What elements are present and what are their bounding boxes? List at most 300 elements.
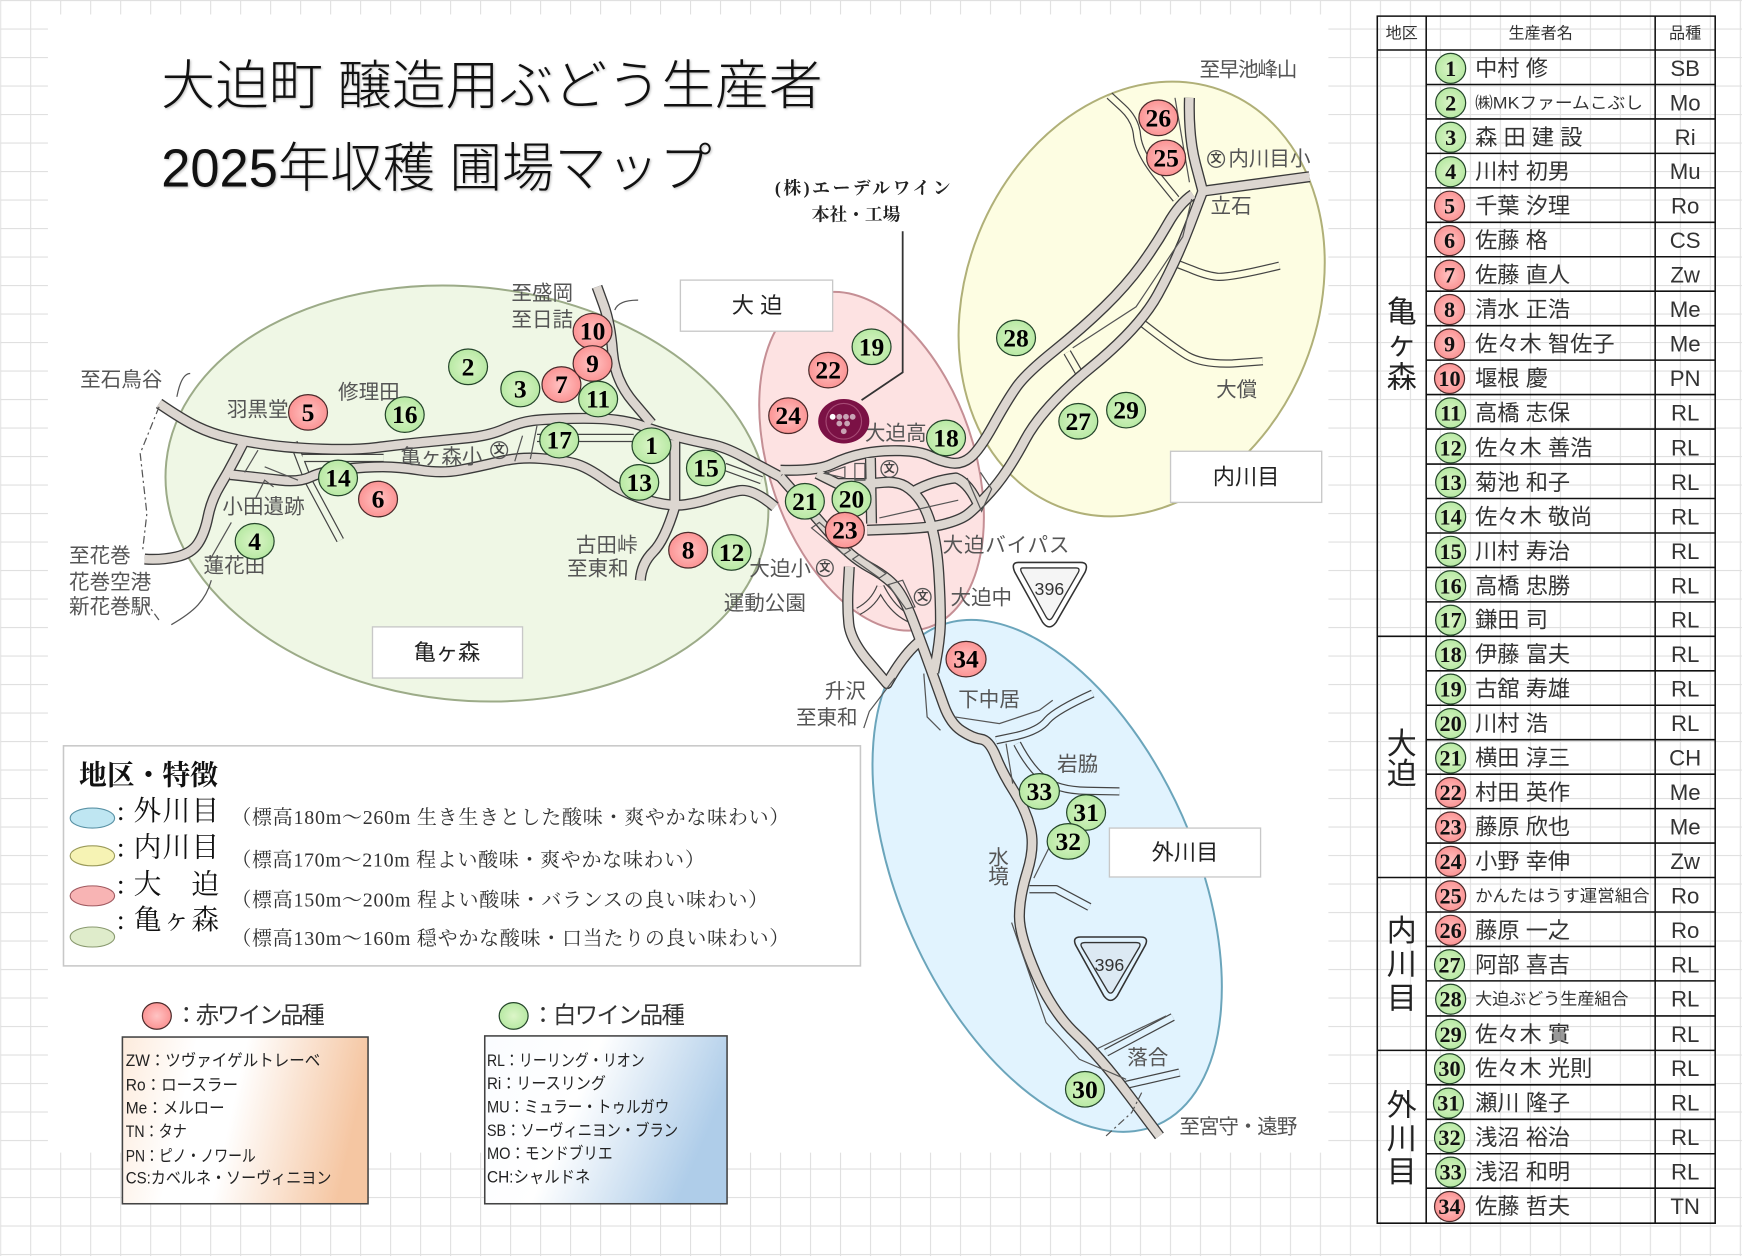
marker 23: 23 bbox=[832, 516, 858, 545]
panel: white wine varieties: Ri：リースリング bbox=[487, 1074, 606, 1093]
row 15: 川村 寿治 bbox=[1475, 539, 1570, 564]
row 12: RL bbox=[1671, 435, 1699, 460]
map place labels: 亀ヶ森小 bbox=[400, 445, 483, 468]
district column: Uchikawame: 目 bbox=[1387, 983, 1417, 1016]
route 396 shield, upper: 396 bbox=[1035, 579, 1064, 599]
map place labels: 至東和 bbox=[796, 707, 858, 730]
map place labels: 至盛岡 bbox=[511, 282, 573, 305]
row 31: RL bbox=[1671, 1091, 1699, 1116]
row 1: SB bbox=[1670, 56, 1700, 81]
panel: white wine varieties: MU：ミュラー・トゥルガウ bbox=[487, 1098, 669, 1117]
row 8 bbox=[1435, 295, 1701, 325]
row 26: 藤原 一之 bbox=[1475, 918, 1570, 943]
row 3 bbox=[1436, 122, 1696, 152]
row 26: 26 bbox=[1440, 918, 1462, 943]
panel: red wine varieties: ZW：ツヴァイゲルトレーベ bbox=[126, 1051, 320, 1070]
row 29 bbox=[1436, 1019, 1699, 1049]
row 9: Me bbox=[1670, 332, 1701, 357]
table header bbox=[1386, 24, 1701, 42]
white wine legend heading: ：白ワイン品種 bbox=[531, 1002, 685, 1028]
row 33: 浅沼 和明 bbox=[1475, 1160, 1570, 1185]
road network bbox=[140, 96, 1309, 1136]
row 7 bbox=[1435, 260, 1701, 290]
marker 8: 8 bbox=[682, 536, 695, 565]
map place labels: 大迫バイパス bbox=[943, 534, 1069, 557]
row 24: Zw bbox=[1670, 849, 1701, 874]
marker 15 bbox=[686, 450, 725, 486]
row 6: CS bbox=[1670, 228, 1701, 253]
row 31: 31 bbox=[1437, 1091, 1460, 1116]
district label: Uchikawame bbox=[1171, 451, 1322, 502]
legend row: Sotokawame bbox=[70, 796, 789, 829]
row 5: 千葉 汐理 bbox=[1475, 194, 1570, 219]
marker 14: 14 bbox=[325, 463, 351, 492]
marker 22: 22 bbox=[815, 356, 841, 385]
legend row: Sotokawame: （標高180m～260m 生き生きとした酸味・爽やかな味わい） bbox=[231, 806, 789, 829]
row 29: RL bbox=[1671, 1022, 1699, 1047]
row 27: RL bbox=[1671, 952, 1699, 977]
row 9: 佐々木 智佐子 bbox=[1475, 332, 1615, 357]
row 9: 9 bbox=[1444, 332, 1455, 357]
row 4 bbox=[1436, 157, 1701, 187]
row 25 bbox=[1436, 881, 1699, 911]
row 7: 7 bbox=[1444, 263, 1455, 288]
route 396 shield, lower bbox=[1075, 937, 1146, 1000]
row 1: 1 bbox=[1445, 56, 1456, 81]
row 30: 30 bbox=[1438, 1056, 1461, 1081]
row 10: 堰根 慶 bbox=[1475, 366, 1548, 391]
district column: Osako bbox=[1387, 728, 1417, 791]
panel: white wine varieties: CH:シャルドネ bbox=[487, 1168, 590, 1187]
row 26 bbox=[1436, 915, 1699, 945]
row 32 bbox=[1435, 1123, 1699, 1153]
map place labels bbox=[69, 59, 1311, 1139]
legend row: Uchikawame: : 内川目 bbox=[117, 833, 219, 864]
row 17: 17 bbox=[1440, 608, 1462, 633]
marker 21: 21 bbox=[792, 487, 818, 516]
map place labels: 立石 bbox=[1211, 195, 1252, 218]
row 16: 16 bbox=[1440, 573, 1462, 598]
marker 4: 4 bbox=[248, 527, 261, 556]
district column: Sotokawame: 川 bbox=[1387, 1123, 1417, 1156]
legend row: Osako: （標高150m～200m 程よい酸味・バランスの良い味わい） bbox=[231, 888, 768, 911]
district column: Uchikawame: 内 bbox=[1387, 915, 1417, 948]
row 13: 13 bbox=[1440, 470, 1462, 495]
district label: Osako: 大 迫 bbox=[732, 293, 782, 318]
marker 26 bbox=[1139, 100, 1178, 136]
panel: red wine varieties: PN：ピノ・ノワール bbox=[126, 1146, 256, 1165]
legend row: Kamegamori bbox=[70, 905, 789, 950]
marker 6 bbox=[359, 481, 397, 517]
row 25: かんたはうす運営組合 bbox=[1475, 886, 1650, 905]
route 396 shield, lower: 396 bbox=[1095, 955, 1124, 975]
panel: red wine varieties: Ro：ロースラー bbox=[126, 1075, 238, 1094]
marker 34 bbox=[946, 641, 986, 677]
route 396 shield, upper bbox=[1013, 562, 1086, 627]
marker 10: 10 bbox=[580, 317, 605, 346]
marker 27: 27 bbox=[1066, 407, 1091, 436]
row 21: 21 bbox=[1440, 746, 1462, 771]
marker 1 bbox=[632, 428, 671, 463]
row 33 bbox=[1436, 1157, 1699, 1187]
row 30 bbox=[1435, 1054, 1699, 1084]
row 13 bbox=[1436, 467, 1699, 497]
row 11: 11 bbox=[1440, 400, 1461, 425]
marker 21 bbox=[785, 484, 824, 519]
marker 12: 12 bbox=[719, 538, 744, 567]
row 19: RL bbox=[1671, 677, 1699, 702]
row 34: 34 bbox=[1438, 1194, 1461, 1219]
map place labels: 升沢 bbox=[825, 680, 866, 703]
row 28 bbox=[1436, 984, 1699, 1014]
row 28: 大迫ぶどう生産組合 bbox=[1475, 990, 1629, 1009]
map place labels: 羽黒堂 bbox=[227, 399, 289, 422]
row 16 bbox=[1436, 571, 1699, 601]
district area: Sotokawame ellipse bbox=[801, 567, 1293, 1185]
marker 28 bbox=[997, 320, 1036, 356]
panel: red wine varieties: CS:カベルネ・ソーヴィニヨン bbox=[126, 1169, 331, 1188]
row 33: RL bbox=[1671, 1160, 1699, 1185]
row 10: PN bbox=[1670, 366, 1701, 391]
row 19: 19 bbox=[1440, 677, 1462, 702]
district area: Uchikawame ellipse bbox=[895, 26, 1388, 572]
row 8: Me bbox=[1670, 297, 1701, 322]
winery leader line bbox=[862, 231, 903, 400]
legend row: Osako bbox=[70, 869, 768, 911]
map place labels: 古田峠 bbox=[576, 534, 638, 557]
row 34: 佐藤 哲夫 bbox=[1475, 1194, 1570, 1219]
icons: school symbols bbox=[491, 151, 1224, 605]
map place labels: 水 bbox=[988, 847, 1009, 870]
row 27 bbox=[1435, 950, 1699, 980]
row 31: 瀬川 隆子 bbox=[1475, 1091, 1570, 1116]
row 34: TN bbox=[1670, 1194, 1700, 1219]
row 12: 12 bbox=[1440, 435, 1462, 460]
row 6 bbox=[1435, 226, 1701, 256]
legend row: Uchikawame bbox=[70, 833, 705, 871]
row 22: 村田 英作 bbox=[1475, 780, 1570, 805]
marker 20 bbox=[832, 481, 871, 517]
marker 24: 24 bbox=[775, 401, 801, 430]
row 33: 33 bbox=[1440, 1160, 1462, 1185]
row 3: 森 田 建 設 bbox=[1475, 125, 1583, 150]
map place labels: 岩脇 bbox=[1057, 753, 1098, 776]
marker 18: 18 bbox=[933, 423, 959, 452]
row 6: 6 bbox=[1444, 228, 1455, 253]
legend heading: 地区・特徴 bbox=[79, 760, 218, 791]
row 24: 小野 幸伸 bbox=[1475, 849, 1570, 874]
row 10: 10 bbox=[1438, 366, 1461, 391]
district column: Osako: 大 bbox=[1387, 728, 1417, 761]
marker 19: 19 bbox=[859, 332, 884, 361]
row 4: 川村 初男 bbox=[1475, 159, 1570, 184]
district column: Kamegamori bbox=[1387, 296, 1417, 394]
table header: 地区 bbox=[1386, 24, 1418, 42]
marker 12 bbox=[712, 535, 751, 570]
district column: Kamegamori: 森 bbox=[1387, 361, 1417, 394]
map place labels: 花巻空港 bbox=[69, 571, 152, 594]
map place labels: 至早池峰山 bbox=[1199, 59, 1297, 82]
marker 11 bbox=[579, 381, 618, 417]
row 7: Zw bbox=[1670, 263, 1701, 288]
map place labels: 蓮花田 bbox=[204, 554, 265, 577]
row 31 bbox=[1433, 1088, 1699, 1118]
map place labels: 下中居 bbox=[958, 689, 1020, 712]
row 14: 佐々木 敬尚 bbox=[1475, 504, 1592, 529]
row 15: 15 bbox=[1440, 539, 1462, 564]
marker 14 bbox=[319, 460, 357, 496]
district label: Sotokawame bbox=[1109, 828, 1261, 877]
row 1: 中村 修 bbox=[1475, 56, 1548, 81]
winery label: (株)エーデルワイン bbox=[775, 178, 950, 199]
map place labels: 境 bbox=[988, 865, 1009, 888]
table header: 品種 bbox=[1669, 24, 1701, 42]
map place labels: 至花巻 bbox=[69, 544, 131, 567]
district label: Uchikawame: 内川目 bbox=[1213, 464, 1279, 489]
marker 16 bbox=[385, 397, 424, 432]
row 18: 18 bbox=[1440, 642, 1462, 667]
row 23 bbox=[1436, 812, 1701, 842]
map place labels: 運動公園 bbox=[724, 592, 806, 615]
row 22: 22 bbox=[1440, 780, 1462, 805]
map sheet bbox=[48, 14, 1328, 1153]
marker 4 bbox=[235, 524, 274, 559]
panel: white wine varieties: SB：ソーヴィニヨン・ブラン bbox=[487, 1120, 678, 1140]
winery label: 本社・工場 bbox=[812, 205, 901, 225]
marker 7 bbox=[542, 367, 581, 402]
marker 27 bbox=[1059, 403, 1098, 439]
marker 2 bbox=[449, 349, 488, 385]
legend row: Kamegamori: （標高130m～160m 穏やかな酸味・口当たりの良い味わい） bbox=[231, 927, 789, 950]
row 28: RL bbox=[1671, 987, 1699, 1012]
marker 9: 9 bbox=[586, 349, 599, 378]
table rows bbox=[1433, 53, 1701, 1222]
marker 3 bbox=[501, 371, 540, 407]
row 14: 14 bbox=[1440, 504, 1462, 529]
row 22: Me bbox=[1670, 780, 1701, 805]
district column: Kamegamori: ヶ bbox=[1387, 328, 1417, 361]
marker 10 bbox=[573, 313, 612, 349]
row 5: 5 bbox=[1444, 194, 1455, 219]
marker 23 bbox=[825, 512, 864, 548]
map place labels: 大迫高 bbox=[865, 422, 927, 445]
row 9 bbox=[1435, 329, 1701, 359]
row 4: 4 bbox=[1445, 159, 1456, 184]
row 18 bbox=[1436, 640, 1699, 670]
map place labels: 小田遺跡 bbox=[222, 495, 305, 518]
map place labels: 至石鳥谷 bbox=[80, 369, 162, 392]
marker 1: 1 bbox=[645, 431, 658, 460]
district area: Osako ellipse bbox=[718, 262, 1025, 661]
legend row: Uchikawame: （標高170m～210m 程よい酸味・爽やかな味わい） bbox=[231, 848, 705, 871]
map place labels: 大迫中 bbox=[950, 586, 1012, 609]
map markers: producers bbox=[235, 100, 1186, 1107]
row 26: Ro bbox=[1671, 918, 1699, 943]
marker 17 bbox=[540, 422, 579, 458]
red wine legend heading: ：赤ワイン品種 bbox=[175, 1002, 325, 1028]
district column: Sotokawame: 目 bbox=[1387, 1156, 1417, 1189]
marker 32: 32 bbox=[1056, 827, 1081, 856]
row 17: 鎌田 司 bbox=[1475, 608, 1548, 633]
row 24: 24 bbox=[1440, 849, 1462, 874]
panel: district legend bbox=[63, 746, 860, 966]
row 3: Ri bbox=[1675, 125, 1696, 150]
row 32: RL bbox=[1671, 1125, 1699, 1150]
row 17 bbox=[1436, 605, 1699, 635]
marker 8 bbox=[669, 532, 708, 568]
marker 33 bbox=[1019, 774, 1059, 809]
row 25: Ro bbox=[1671, 883, 1699, 908]
row 13: 菊池 和子 bbox=[1475, 470, 1570, 495]
marker 7: 7 bbox=[555, 370, 568, 399]
row 23: 藤原 欣也 bbox=[1475, 814, 1570, 839]
marker 11: 11 bbox=[586, 385, 610, 414]
map place labels: 落合 bbox=[1127, 1047, 1169, 1070]
row 20 bbox=[1436, 709, 1699, 739]
marker 26: 26 bbox=[1146, 103, 1171, 132]
row 11 bbox=[1436, 398, 1699, 428]
map place labels: 大迫小 bbox=[749, 558, 811, 581]
icons: school symbols: 文 bbox=[917, 589, 928, 603]
title bbox=[161, 57, 823, 198]
row 32: 浅沼 裕治 bbox=[1475, 1125, 1570, 1150]
panel: red wine varieties: TN：タナ bbox=[126, 1122, 187, 1141]
district column: Osako: 迫 bbox=[1387, 758, 1417, 791]
district label: Kamegamori: 亀ヶ森 bbox=[414, 640, 480, 665]
row 2 bbox=[1436, 88, 1701, 118]
legend row: Sotokawame: : 外川目 bbox=[117, 796, 219, 827]
marker 30: 30 bbox=[1072, 1075, 1098, 1104]
map place labels: 新花巻駅 bbox=[69, 595, 151, 618]
district column: Sotokawame: 外 bbox=[1387, 1089, 1417, 1122]
district label: Osako bbox=[680, 280, 833, 331]
panel: white wine varieties: MO：モンドブリエ bbox=[487, 1143, 613, 1163]
row 28: 28 bbox=[1440, 987, 1462, 1012]
panel: white wine varieties bbox=[485, 1036, 727, 1204]
row 20: 20 bbox=[1440, 711, 1462, 736]
marker 16: 16 bbox=[392, 400, 418, 429]
marker 31 bbox=[1067, 795, 1106, 830]
row 20: RL bbox=[1671, 711, 1699, 736]
row 24 bbox=[1436, 846, 1701, 876]
marker 33: 33 bbox=[1027, 777, 1052, 806]
marker 22 bbox=[809, 352, 848, 388]
legend row: Osako: : 大 迫 bbox=[117, 869, 219, 900]
row 14 bbox=[1436, 502, 1699, 532]
map place labels: 至東和 bbox=[567, 558, 629, 581]
row 16: 高橋 忠勝 bbox=[1475, 573, 1570, 598]
row 19 bbox=[1436, 674, 1699, 704]
marker 19 bbox=[852, 329, 891, 365]
row 18: 伊藤 富夫 bbox=[1475, 642, 1570, 667]
winery label bbox=[775, 178, 950, 225]
marker 28: 28 bbox=[1003, 323, 1029, 352]
map place labels: 内川目小 bbox=[1228, 147, 1311, 170]
row 27: 阿部 喜吉 bbox=[1475, 952, 1570, 977]
row 19: 古舘 寿雄 bbox=[1475, 677, 1570, 702]
row 14: RL bbox=[1671, 504, 1699, 529]
title: 大迫町 醸造用ぶどう生産者 bbox=[161, 57, 823, 116]
row 18: RL bbox=[1671, 642, 1699, 667]
icon: winery grape seal bbox=[818, 399, 869, 443]
district label: Kamegamori bbox=[372, 627, 523, 678]
row 27: 27 bbox=[1438, 952, 1461, 977]
marker 31: 31 bbox=[1073, 798, 1099, 827]
panel: producer table bbox=[1377, 16, 1715, 1223]
panel: red wine varieties: Me：メルロー bbox=[126, 1099, 225, 1118]
row 5: Ro bbox=[1671, 194, 1699, 219]
map place labels: 至宮守・遠野 bbox=[1179, 1116, 1297, 1139]
row 15 bbox=[1436, 536, 1699, 566]
marker 15: 15 bbox=[693, 453, 719, 482]
row 30: RL bbox=[1671, 1056, 1699, 1081]
row 12 bbox=[1436, 433, 1699, 463]
marker 34: 34 bbox=[953, 645, 979, 674]
row 7: 佐藤 直人 bbox=[1475, 263, 1570, 288]
icons: school symbols: 文 bbox=[819, 560, 830, 574]
district label: Sotokawame: 外川目 bbox=[1152, 840, 1218, 865]
marker 13 bbox=[620, 465, 659, 500]
marker 5: 5 bbox=[302, 398, 314, 427]
icons: school symbols: 文 bbox=[884, 461, 895, 475]
row 8: 清水 正浩 bbox=[1475, 297, 1570, 322]
icons: school symbols: 文 bbox=[1211, 151, 1222, 165]
marker 18 bbox=[927, 420, 965, 456]
map place labels: 修理田 bbox=[338, 381, 400, 404]
marker 13: 13 bbox=[626, 468, 652, 497]
marker 9 bbox=[573, 346, 612, 381]
marker 29 bbox=[1107, 392, 1146, 428]
marker 24 bbox=[769, 398, 808, 433]
row 16: RL bbox=[1671, 573, 1699, 598]
title: 2025年収穫 圃場マップ bbox=[161, 139, 711, 198]
marker 30 bbox=[1066, 1071, 1104, 1107]
row 21 bbox=[1436, 743, 1701, 773]
row 23: Me bbox=[1670, 814, 1701, 839]
row 3: 3 bbox=[1445, 125, 1456, 150]
row 11: RL bbox=[1671, 400, 1699, 425]
panel: white wine varieties: RL：リーリング・リオン bbox=[487, 1051, 645, 1070]
district column: Uchikawame: 川 bbox=[1387, 948, 1417, 981]
row 30: 佐々木 光則 bbox=[1475, 1056, 1592, 1081]
marker 25 bbox=[1147, 140, 1186, 176]
row 6: 佐藤 格 bbox=[1475, 228, 1548, 253]
row 20: 川村 浩 bbox=[1475, 711, 1548, 736]
panel: red wine varieties bbox=[122, 1037, 368, 1204]
row 4: Mu bbox=[1670, 159, 1701, 184]
marker 2: 2 bbox=[462, 352, 474, 381]
marker 32 bbox=[1047, 824, 1089, 859]
marker 29: 29 bbox=[1113, 396, 1139, 425]
row 12: 佐々木 善浩 bbox=[1475, 435, 1592, 460]
row 25: 25 bbox=[1440, 883, 1462, 908]
marker 5 bbox=[289, 395, 327, 430]
row 8: 8 bbox=[1444, 297, 1455, 322]
row 22 bbox=[1436, 777, 1701, 808]
row 23: 23 bbox=[1440, 814, 1462, 839]
row 2: 2 bbox=[1445, 90, 1456, 115]
row 2: Mo bbox=[1670, 90, 1701, 115]
table header: 生産者名 bbox=[1508, 24, 1573, 42]
row 5 bbox=[1435, 191, 1699, 221]
row 2: ㈱MKファームこぶし bbox=[1475, 93, 1643, 112]
row 13: RL bbox=[1671, 470, 1699, 495]
district column: Kamegamori: 亀 bbox=[1387, 296, 1417, 329]
legend row: Kamegamori: : 亀ヶ森 bbox=[117, 905, 219, 936]
icons: school symbols: 文 bbox=[494, 442, 505, 456]
map place labels: 大償 bbox=[1216, 379, 1257, 402]
row 21: CH bbox=[1669, 746, 1701, 771]
